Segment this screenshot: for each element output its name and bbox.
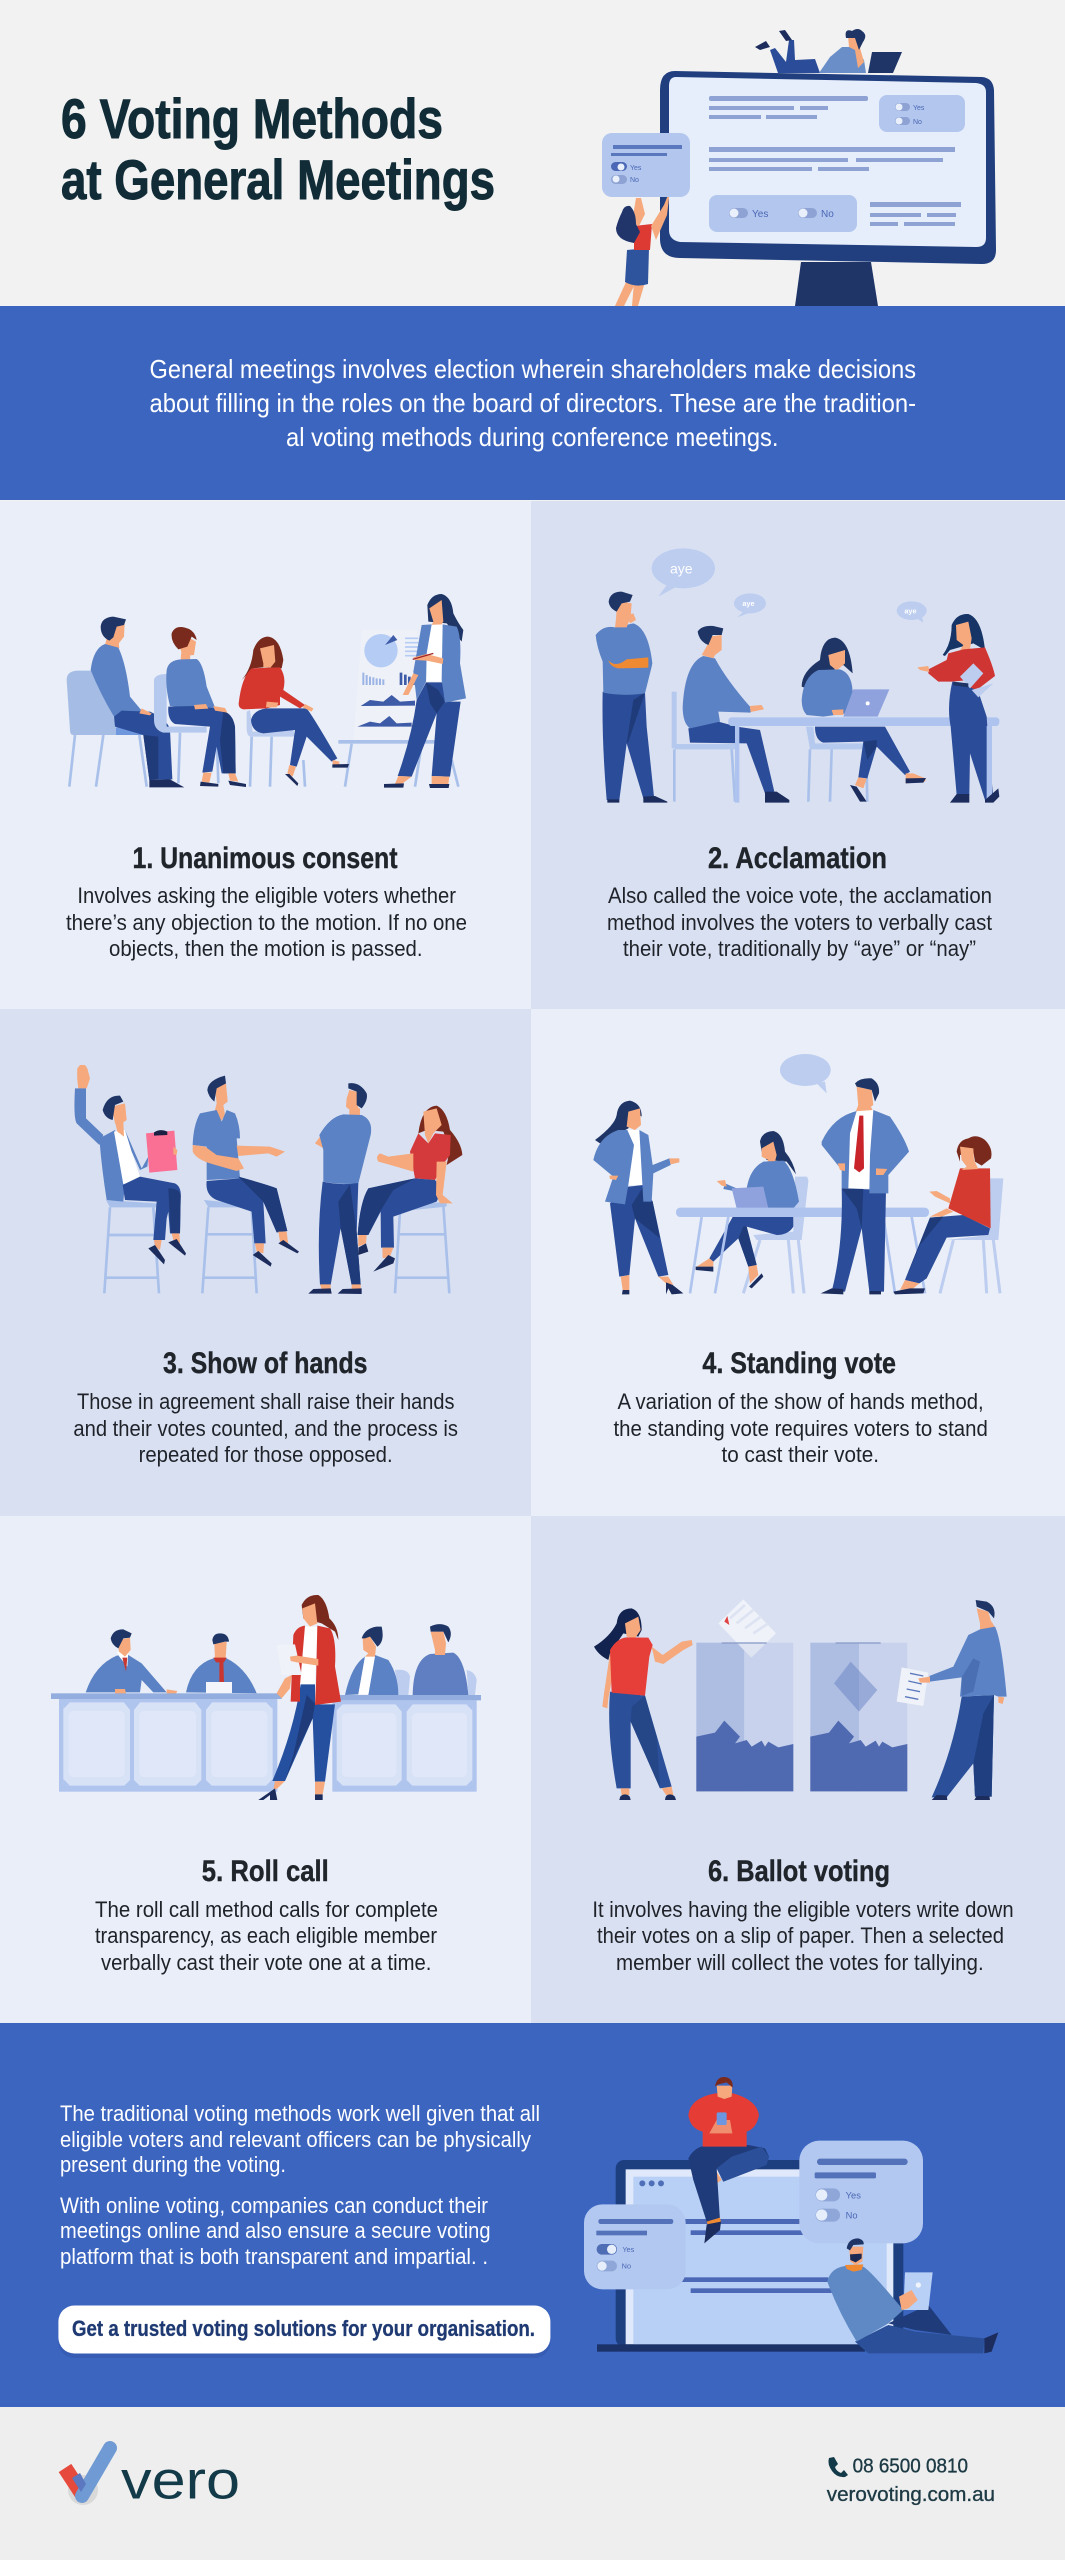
woman in red on stool: [358, 1106, 462, 1272]
description: [607, 883, 992, 961]
illustration: voting monitor: Yes: [913, 105, 925, 112]
man standing: [596, 592, 667, 803]
logo: vero: [121, 2450, 240, 2510]
description: [73, 1389, 458, 1467]
illustration: voting monitor: No: [821, 209, 834, 220]
description: The roll call method calls for complete: [95, 1897, 438, 1922]
seated person one: [86, 1629, 177, 1694]
description: their vote, traditionally by “aye” or “nay”: [623, 936, 976, 961]
illustration: voting monitor: [602, 29, 996, 306]
seated person five: [413, 1624, 468, 1695]
woman in red seated right: [893, 1136, 992, 1294]
illustration: voice vote around a table: [596, 548, 999, 803]
panel: 6. Ballot voting: [531, 1516, 1065, 2023]
illustration: voting monitor: Yes: [630, 165, 642, 172]
description: Also called the voice vote, the acclamation: [608, 883, 992, 908]
heading: 1. Unanimous consent: [132, 842, 398, 875]
illustration: seated audience and presenter: [67, 594, 466, 788]
bubble: right poll: Yes: [846, 2190, 861, 2200]
contact details: 08 6500 0810: [853, 2456, 968, 2478]
chair and table: [672, 692, 867, 802]
closing text: platform that is both transparent and impartial. .: [60, 2244, 488, 2269]
seated person two: [186, 1633, 257, 1693]
description: [592, 1897, 1014, 1975]
footer: [0, 2407, 1065, 2560]
description: [66, 883, 467, 961]
description: It involves having the eligible voters write down: [592, 1897, 1014, 1922]
closing text: meetings online and also ensure a secure voting: [60, 2218, 490, 2243]
intro text: about filling in the roles on the board of directors. These are the tradition-: [150, 388, 916, 418]
bearded man with tablet: [827, 2238, 998, 2353]
contact details: [827, 2456, 995, 2506]
bubble: left poll: Yes: [622, 2245, 635, 2254]
illustration: ballot boxes: [594, 1599, 1007, 1800]
illustration: voting monitor: No: [913, 119, 922, 126]
bubble: right poll: No: [846, 2210, 858, 2220]
closing text: With online voting, companies can conduct their: [60, 2193, 488, 2218]
description: to cast their vote.: [722, 1442, 879, 1467]
panel: 1. Unanimous consent: [0, 501, 531, 1009]
description: the standing vote requires voters to stand: [614, 1416, 988, 1441]
bubble: right poll: [799, 2141, 923, 2243]
illustration: voting monitor: Yes: [752, 209, 768, 220]
button: [58, 2306, 550, 2358]
closing text: [60, 2101, 540, 2269]
left desk: [51, 1693, 282, 1792]
bubble: left poll: No: [622, 2262, 631, 2271]
bubble: left poll: [584, 2204, 686, 2289]
seated person four: [345, 1627, 477, 1695]
woman speaking in red jacket: [258, 1595, 341, 1800]
right desk: [332, 1695, 481, 1792]
header section: [0, 0, 1065, 306]
closing text: The traditional voting methods work well given that all: [60, 2101, 540, 2126]
description: there’s any objection to the motion. If no one: [66, 910, 467, 935]
panel: introduction band: [0, 306, 1065, 500]
woman standing left: [593, 1101, 683, 1294]
heading: 3. Show of hands: [163, 1347, 368, 1380]
man handing ballot: [897, 1600, 1007, 1800]
intro text: General meetings involves election wherein shareholders make decisions: [150, 354, 916, 384]
description: [614, 1389, 988, 1467]
illustration: online voting laptop: [584, 2077, 998, 2353]
woman dropping ballot: [594, 1608, 693, 1800]
description: member will collect the votes for tallying.: [616, 1950, 984, 1975]
man standing: [308, 1083, 371, 1294]
description: their votes on a slip of paper. Then a selected: [597, 1923, 1004, 1948]
description: method involves the voters to verbally cast: [607, 910, 992, 935]
description: Involves asking the eligible voters whether: [77, 883, 456, 908]
ballot box left: [696, 1599, 793, 1791]
laptop: [597, 2160, 903, 2352]
speech bubbles: [652, 548, 927, 623]
presenter: [384, 594, 466, 788]
panel: 2. Acclamation: [531, 501, 1065, 1009]
panel: online voting call to action: [0, 2023, 1065, 2407]
button: Get a trusted voting solutions for your organisation.: [72, 2316, 535, 2341]
panel: 5. Roll call: [0, 1516, 531, 2023]
illustration: voting monitor: No: [630, 177, 639, 184]
closing text: present during the voting.: [60, 2152, 286, 2177]
heading: 2. Acclamation: [708, 842, 887, 875]
woman standing in red: [917, 614, 999, 803]
stools: [104, 1200, 449, 1293]
speech bubbles: aye: [742, 599, 755, 608]
man seated: [67, 617, 184, 787]
title: 6 Voting Methods: [61, 87, 443, 150]
contact details: verovoting.com.au: [827, 2484, 995, 2506]
description: A variation of the show of hands method,: [618, 1389, 984, 1414]
illustration: people standing around a table: [593, 1054, 1003, 1294]
description: and their votes counted, and the process is: [73, 1416, 458, 1441]
description: verbally cast their vote one at a time.: [101, 1950, 431, 1975]
description: [95, 1897, 438, 1975]
woman at laptop: [802, 638, 926, 802]
woman with bun seated: [154, 627, 246, 787]
heading: 5. Roll call: [202, 1855, 329, 1888]
title: at General Meetings: [61, 148, 495, 211]
icon: phone: [828, 2457, 848, 2477]
logo mark: [65, 2448, 110, 2505]
illustration: panel at a desk with speaker: [51, 1595, 481, 1800]
description: Those in agreement shall raise their hands: [77, 1389, 454, 1414]
title: [61, 87, 495, 211]
closing text: eligible voters and relevant officers can be physically: [60, 2127, 531, 2152]
illustration: people on stools raising a hand: [74, 1065, 462, 1294]
man seated: [683, 626, 789, 803]
heading: 6. Ballot voting: [708, 1855, 890, 1888]
intro text: [150, 354, 916, 452]
speech bubble: [780, 1054, 831, 1093]
man talking: [193, 1076, 299, 1267]
woman sitting on laptop: [688, 2077, 769, 2243]
intro text: al voting methods during conference meetings.: [286, 422, 778, 452]
woman seated at laptop: [696, 1131, 799, 1288]
man lying on monitor: [755, 29, 902, 73]
ballot box right: [810, 1642, 907, 1791]
logo: [65, 2448, 240, 2510]
heading: 4. Standing vote: [702, 1347, 896, 1380]
speech bubbles: aye: [670, 560, 693, 576]
speech bubbles: aye: [904, 606, 917, 615]
panel: 3. Show of hands: [0, 1009, 531, 1516]
woman reaching: [615, 190, 670, 306]
description: repeated for those opposed.: [139, 1442, 393, 1467]
chairs: [743, 1177, 1003, 1293]
woman in red seated: [239, 637, 349, 787]
man raising hand: [74, 1065, 186, 1264]
description: transparency, as each eligible member: [95, 1923, 437, 1948]
man in suit standing: [821, 1078, 909, 1294]
panel: 4. Standing vote: [531, 1009, 1065, 1516]
description: objects, then the motion is passed.: [109, 936, 422, 961]
